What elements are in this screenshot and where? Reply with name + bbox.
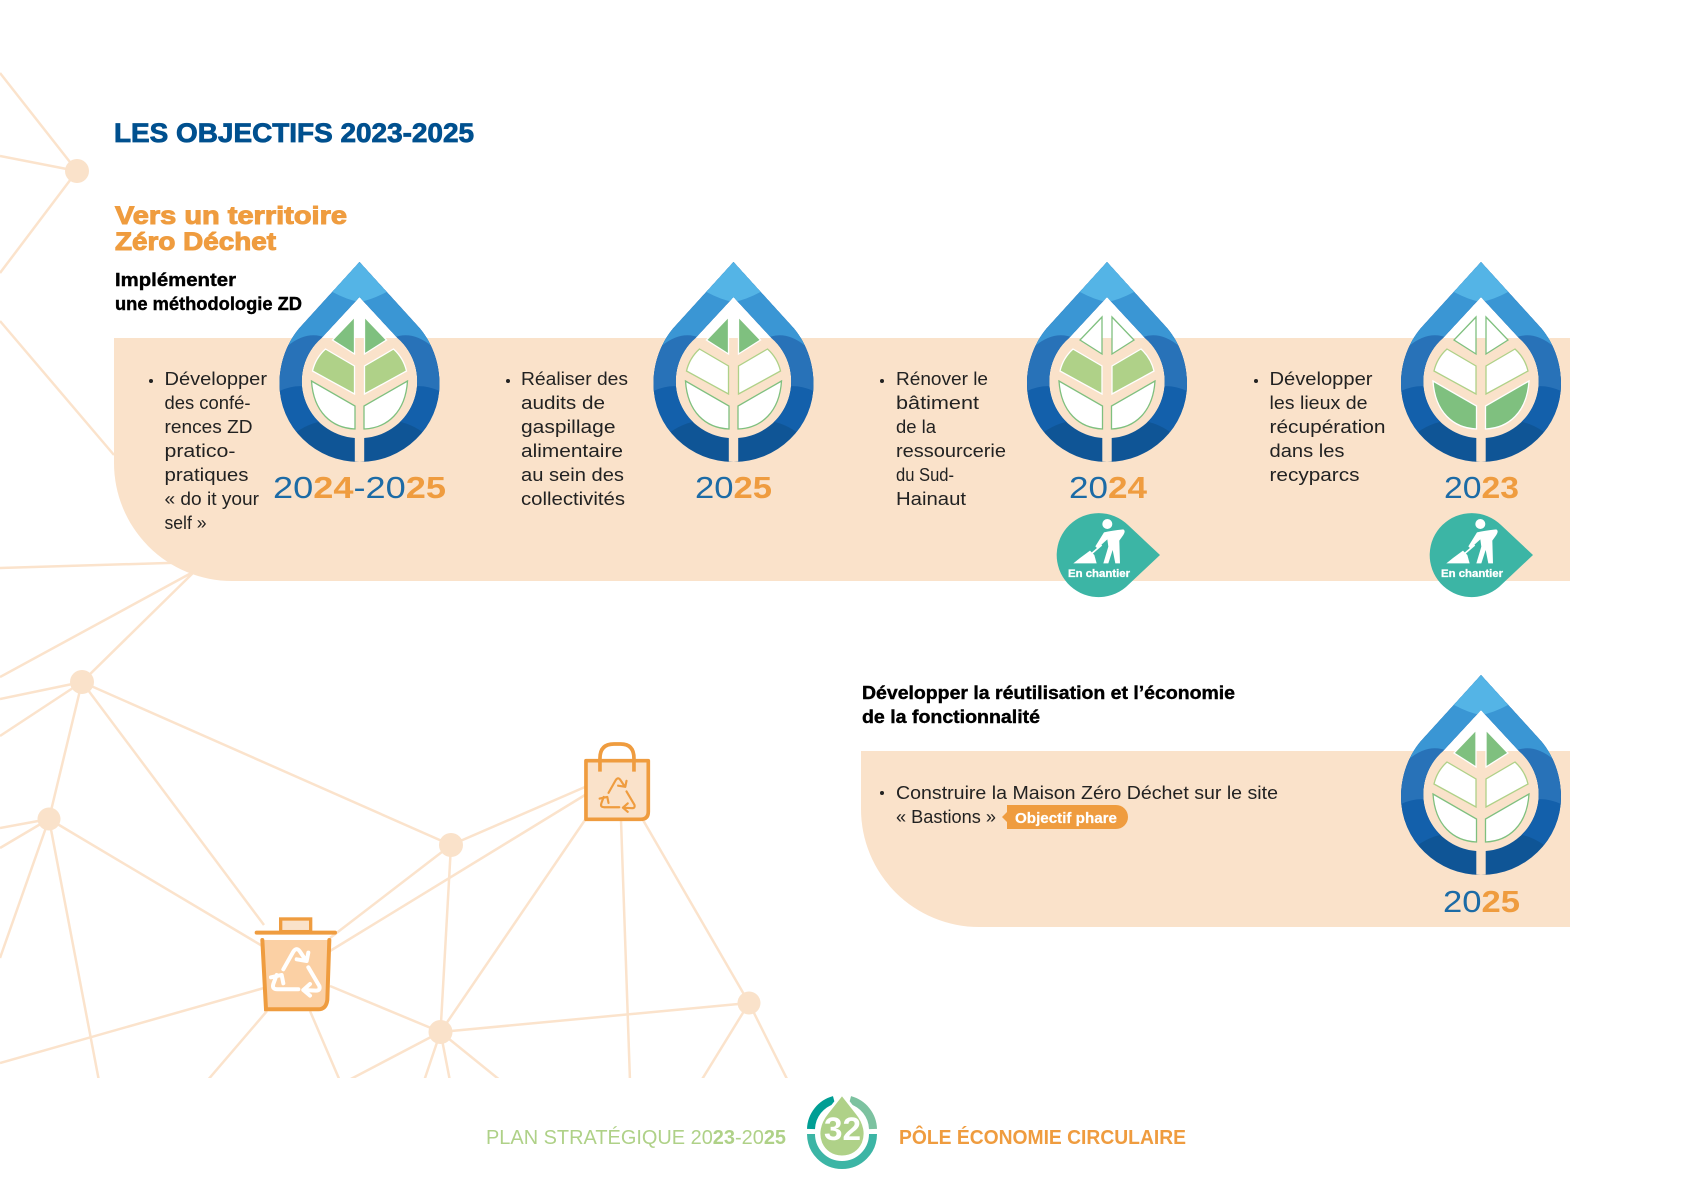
text block: audits [506, 368, 628, 509]
text block: maison zero dechet: « Bastions » [896, 806, 996, 827]
background network [0, 73, 788, 1081]
text block: audits: alimentaire [521, 440, 623, 461]
text block: recyparcs: les lieux de [1270, 392, 1368, 413]
badge: objectif phare: Objectif phare [1015, 811, 1117, 827]
year: 2024: 2024 [1069, 470, 1148, 505]
text block: ressourcerie: Hainaut [896, 488, 966, 509]
text block: conferences: pratiques [164, 464, 248, 485]
text block: conferences: des confé- [164, 392, 250, 413]
text block: conferences: self » [164, 512, 206, 533]
year: 2025 reutilisation: 2025 [1443, 884, 1520, 919]
badge: en chantier 2023 [1430, 513, 1533, 597]
text block: audits: audits de [521, 392, 605, 413]
text block: audits: collectivités [521, 488, 625, 509]
heading: vers un territoire zero dechet [115, 202, 347, 256]
subheading: implementer: Implémenter [115, 270, 236, 290]
icon: drop 2024-2025 [260, 257, 460, 462]
heading: vers un territoire zero dechet: Vers un territoire [115, 202, 347, 230]
text block: conferences: pratico- [164, 440, 236, 461]
text block: audits: au sein des [521, 464, 624, 485]
year: 2024-2025: 2024-2025 [273, 470, 446, 505]
text block: ressourcerie: Rénover le [896, 368, 988, 389]
badge: en chantier 2024 [1057, 513, 1160, 597]
footer: page number logo: 32 [824, 1111, 861, 1147]
panel: territoire zero dechet band [114, 338, 1570, 581]
text block: recyparcs [1254, 368, 1386, 485]
footer: page number logo [811, 1094, 873, 1165]
text block: audits: gaspillage [521, 416, 616, 437]
badge: objectif phare [1002, 805, 1128, 829]
icon: recycling bin [257, 919, 335, 1009]
text block: ressourcerie: bâtiment [896, 392, 979, 413]
text block: ressourcerie: ressourcerie [896, 440, 1006, 461]
text block: conferences: rences ZD [164, 416, 252, 437]
icon: drop 2024 [1007, 257, 1207, 462]
heading: vers un territoire zero dechet: Zéro Déchet [115, 228, 277, 256]
text block: maison zero dechet [880, 782, 1278, 827]
text block: ressourcerie: du Sud- [896, 464, 954, 485]
footer: pole economie circulaire: PÔLE ÉCONOMIE CIRCULAIRE [899, 1125, 1186, 1149]
title: LES OBJECTIFS 2023-2025 [114, 118, 474, 148]
text block: recyparcs: récupération [1270, 416, 1386, 437]
year: 2023: 2023 [1444, 470, 1519, 505]
icon: recycling bag [586, 744, 648, 819]
text block: conferences: « do it your [164, 488, 259, 509]
subheading: implementer: une méthodologie ZD [115, 294, 302, 314]
text block: recyparcs: Développer [1270, 368, 1372, 389]
subheading: reutilisation: Développer la réutilisation et l’économie [862, 683, 1235, 703]
badge: en chantier 2023: En chantier [1441, 568, 1504, 580]
panel: reutilisation band [861, 751, 1570, 927]
text block: maison zero dechet: Construire la Maison Zéro Déchet sur le site [896, 782, 1278, 803]
footer: plan strategique: PLAN STRATÉGIQUE 2023-2025 [486, 1126, 786, 1149]
text block: ressourcerie: de la [896, 416, 937, 437]
text block: recyparcs: recyparcs [1270, 464, 1360, 485]
text block: recyparcs: dans les [1270, 440, 1344, 461]
text block: ressourcerie [880, 368, 1006, 509]
icon: drop 2023 [1381, 257, 1581, 462]
subheading: implementer [115, 270, 302, 314]
text block: conferences [149, 368, 267, 533]
text block: conferences: Développer [164, 368, 267, 389]
icon: drop 2025 reutilisation [1381, 670, 1581, 875]
text block: audits: Réaliser des [521, 368, 628, 389]
badge: en chantier 2024: En chantier [1068, 568, 1131, 580]
icon: drop 2025 [634, 257, 834, 462]
year: 2025: 2025 [695, 470, 772, 505]
subheading: reutilisation [862, 683, 1235, 727]
subheading: reutilisation: de la fonctionnalité [862, 707, 1040, 727]
